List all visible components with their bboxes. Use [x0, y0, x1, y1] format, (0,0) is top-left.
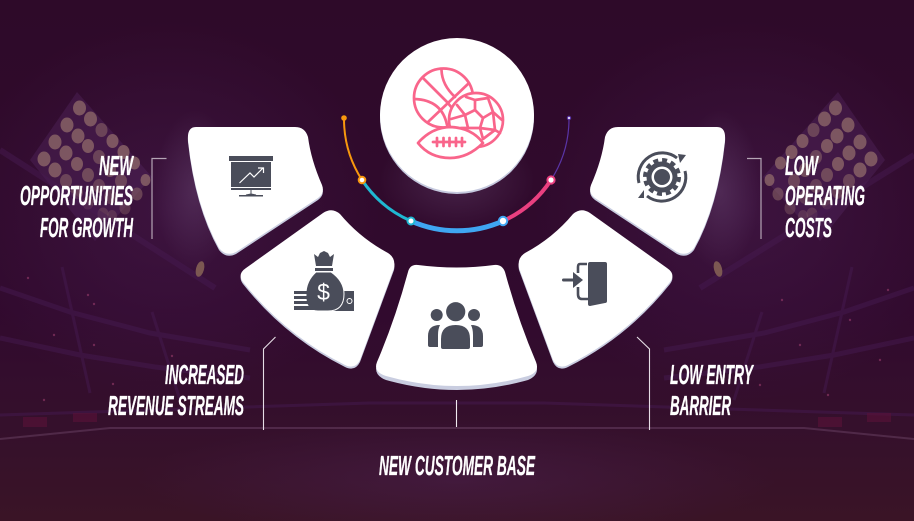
connector: new opportunities — [152, 158, 166, 239]
icon: money bag — [294, 251, 354, 311]
icon: money bag: $ — [317, 279, 330, 305]
label: low entry barrier: LOW ENTRY — [670, 359, 754, 390]
connector: low operating costs — [747, 158, 761, 239]
connector: new customer base — [456, 400, 458, 427]
glow under central circle — [379, 128, 535, 232]
panel: new opportunities for growth — [188, 127, 323, 256]
label: low operating costs: LOW — [785, 150, 819, 181]
floodlight left — [30, 92, 152, 241]
panel: increased revenue streams — [241, 210, 394, 369]
label: low operating costs: COSTS — [785, 212, 832, 243]
icon: presentation chart — [229, 156, 273, 196]
icon: door entry — [564, 262, 607, 306]
text: NEW CUSTOMER BASE — [379, 450, 536, 481]
label: new opportunities for growth: NEW — [99, 150, 134, 181]
progress arc — [341, 115, 571, 231]
icon: sports balls — [414, 68, 503, 158]
central circle with sports icon — [380, 38, 534, 194]
icon: people — [428, 302, 483, 349]
label: low operating costs — [785, 150, 865, 243]
icon: gear — [638, 153, 686, 201]
text: FOR GROWTH — [40, 212, 133, 243]
label: low entry barrier — [670, 359, 754, 421]
panel: low operating costs — [590, 127, 725, 256]
text: REVENUE STREAMS — [108, 390, 244, 421]
floodlight right — [763, 92, 885, 241]
label: increased revenue streams — [108, 359, 244, 421]
label: new opportunities for growth: OPPORTUNITIES — [20, 180, 133, 211]
connector: low entry barrier — [637, 337, 650, 430]
label: low entry barrier: BARRIER — [670, 390, 731, 421]
panel: low entry barrier — [519, 210, 672, 369]
connector: increased revenue — [264, 337, 276, 430]
label: new opportunities for growth — [20, 150, 134, 243]
panel: new customer base — [376, 265, 537, 390]
text: INCREASED — [165, 359, 244, 390]
